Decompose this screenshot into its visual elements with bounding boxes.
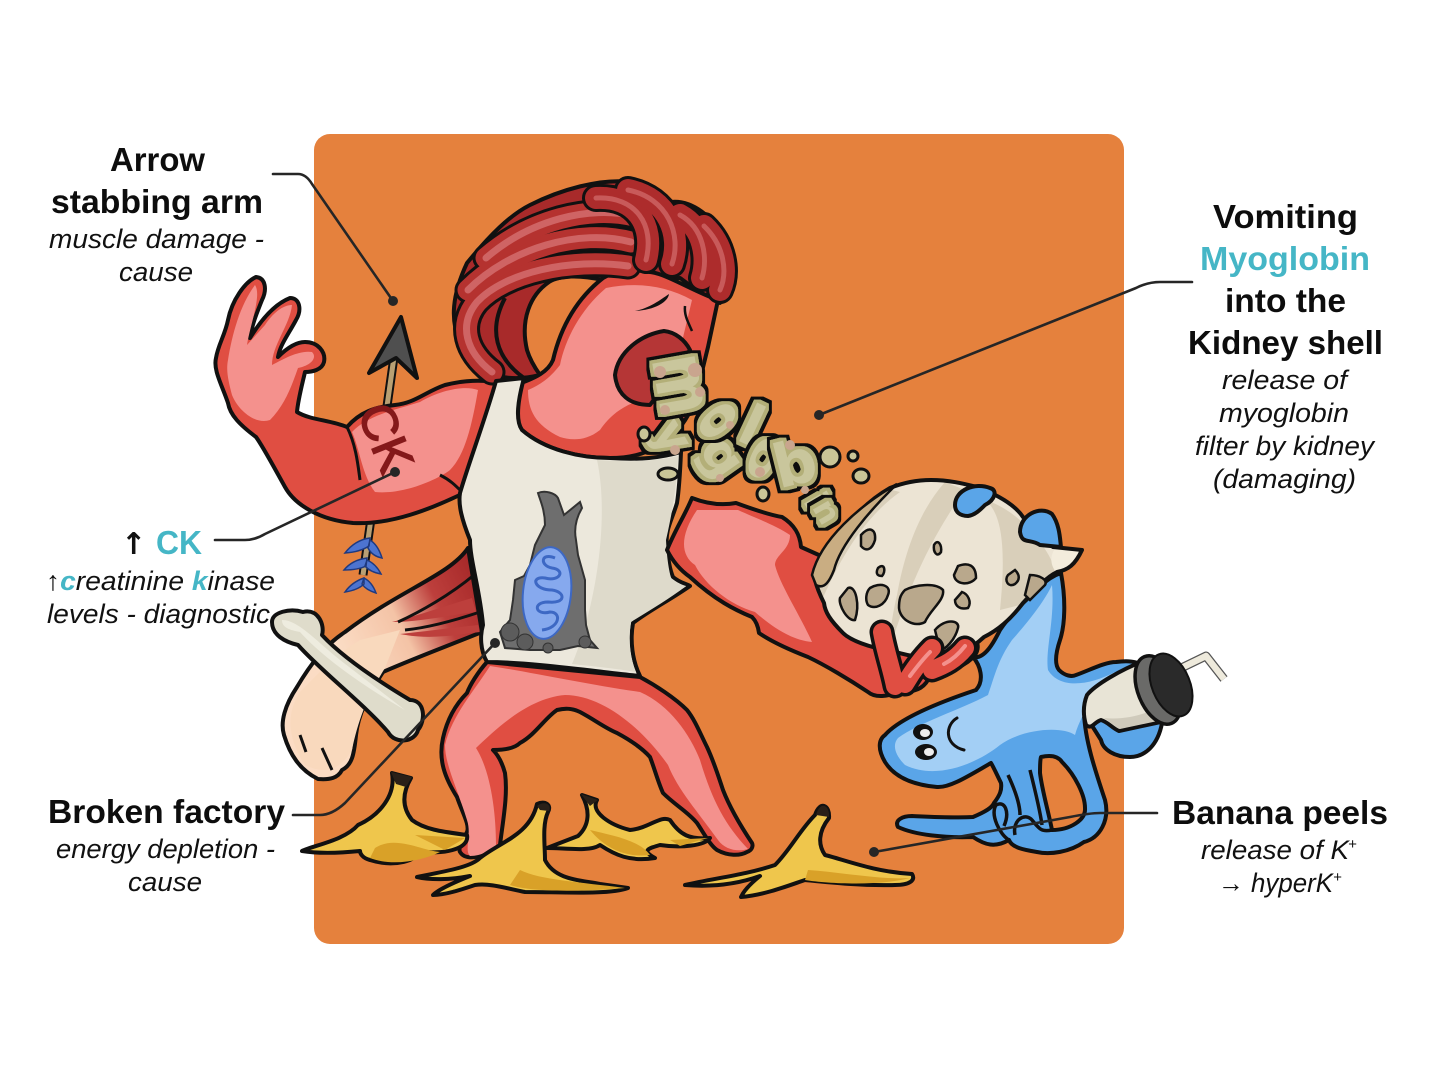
letter o: o [729, 426, 792, 488]
straw [1175, 656, 1224, 679]
label: vomiting myoglobin: release of [1222, 365, 1350, 395]
tan rim [812, 484, 897, 586]
face highlight [528, 285, 692, 439]
letter g: g [687, 423, 758, 489]
banana peel 3 [547, 794, 710, 859]
label: vomiting myoglobin: filter by kidney [1195, 431, 1376, 461]
letter y: y [641, 408, 705, 464]
illustration: head and neck [517, 270, 718, 458]
bicep highlight [352, 388, 478, 492]
illustration: drink cup with straw [1084, 647, 1224, 731]
illustration: right arm holding kidney shell [667, 498, 978, 696]
label: vomiting myoglobin: Vomiting [1213, 198, 1358, 235]
letter i: i [795, 485, 835, 516]
illustration: banana peels [302, 772, 913, 897]
label: vomiting myoglobin [1188, 198, 1383, 494]
shell ridges [815, 482, 1055, 650]
illustration: fingers cradling shell [882, 632, 965, 686]
leader: arrow label [273, 174, 398, 306]
illustration: back hair [454, 181, 732, 378]
label: CK: levels - diagnostic [47, 599, 271, 629]
mottling [654, 363, 809, 494]
leader: vomiting label [814, 282, 1192, 420]
mouth [615, 331, 690, 405]
illustration: arrow stabbing arm [344, 317, 417, 593]
label: vomiting myoglobin: (damaging) [1213, 464, 1356, 494]
arrow shaft [363, 357, 394, 575]
label: broken factory: cause [128, 867, 202, 897]
label: CK: ↑creatinine kinase [46, 566, 275, 596]
label: banana peels: → hyperK [1218, 868, 1334, 898]
illustration: kidney shell [812, 480, 1082, 658]
label: banana peels: + [1348, 836, 1357, 853]
letter l: l [729, 393, 774, 460]
creature eyes [913, 724, 937, 760]
gap between creature limbs [1040, 756, 1085, 830]
hand highlight [227, 285, 314, 421]
label: vomiting myoglobin: Kidney shell [1188, 324, 1383, 361]
CK tattoo: CK [347, 395, 425, 481]
illustration: front hair strands and bangs [467, 190, 724, 372]
label: arrow stabbing arm [49, 141, 264, 287]
leader: banana peels label [869, 813, 1157, 857]
label: CK [46, 524, 275, 629]
creature body highlight [895, 585, 1115, 771]
label: CK: CK [156, 524, 202, 561]
illustration: stabbed muscular arm and hand [215, 277, 500, 523]
label: banana peels: release of K [1201, 835, 1350, 865]
label: arrow stabbing arm: muscle damage - [49, 224, 264, 254]
label: broken factory: Broken factory [48, 793, 286, 830]
label: CK: ↑ [121, 527, 146, 562]
letter o: o [683, 386, 749, 452]
cup lid [1126, 649, 1190, 731]
shirt shadow [572, 456, 686, 672]
label: vomiting myoglobin: Myoglobin [1200, 240, 1370, 277]
cup body [1084, 660, 1170, 731]
eye [635, 294, 669, 311]
arrow head [369, 317, 417, 378]
label: banana peels [1172, 794, 1388, 898]
illustration: vomited myoglobin letters [632, 347, 869, 531]
illustration: back arm with exposed muscle, peach hand and bone [272, 548, 482, 779]
banana peel 2 [417, 803, 628, 895]
nose [685, 306, 692, 331]
fletching [344, 538, 382, 593]
label: vomiting myoglobin: myoglobin [1219, 398, 1349, 428]
shell outline [815, 480, 1082, 658]
label: arrow stabbing arm: Arrow [110, 141, 205, 178]
banana peel 4 [685, 806, 913, 897]
muscle streaks [392, 598, 480, 637]
label: banana peels: + [1333, 869, 1342, 886]
illustration: blue creature [880, 573, 1162, 853]
label: banana peels: Banana peels [1172, 794, 1388, 831]
broken factory [500, 492, 597, 653]
peach hand [290, 630, 400, 770]
illustration: legs [441, 662, 752, 857]
creature fingers on shell [955, 486, 995, 516]
label: arrow stabbing arm: stabbing arm [51, 183, 263, 220]
illustration: shirt with factory and mitochondrion [459, 378, 690, 676]
label: arrow stabbing arm: cause [119, 257, 193, 287]
label: broken factory [48, 793, 286, 897]
letter n: n [805, 492, 849, 531]
banana peel 1 [302, 772, 467, 863]
mitochondrion [518, 545, 576, 641]
label: broken factory: energy depletion - [56, 834, 275, 864]
droplets [638, 427, 869, 501]
panel: orange background [314, 134, 1124, 944]
letter b: b [766, 425, 824, 503]
leader: broken factory label [293, 638, 500, 815]
shell spots [840, 530, 1046, 650]
creature mouth [948, 718, 964, 750]
leader: CK label [215, 467, 400, 540]
label: vomiting myoglobin: into the [1225, 282, 1346, 319]
letter m: m [632, 347, 732, 422]
